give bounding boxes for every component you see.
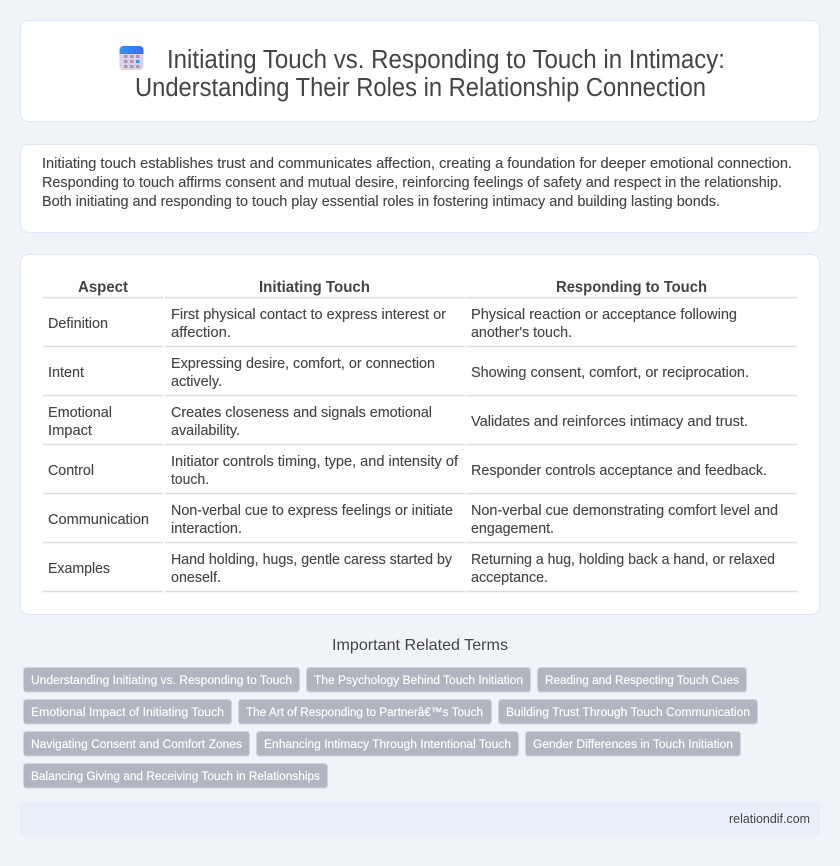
intro text: Initiating touch establishes trust and communicates affection, creating a foundation for deeper emotional connection. bbox=[42, 156, 792, 172]
row: intent: Intent bbox=[48, 365, 84, 381]
related terms chips: Balancing Giving and Receiving Touch in Relationships bbox=[31, 769, 320, 783]
row: emotional impact bbox=[48, 405, 748, 439]
row: definition: affection. bbox=[171, 325, 231, 341]
related terms chips: Understanding Initiating vs. Responding to Touch bbox=[31, 673, 292, 687]
title: Understanding Their Roles in Relationship Connection bbox=[135, 74, 706, 102]
table header: Initiating Touch bbox=[259, 279, 370, 296]
row: definition bbox=[48, 307, 737, 341]
row: intent: actively. bbox=[171, 374, 222, 390]
footer: relationdif.com bbox=[729, 812, 810, 826]
row: control: Control bbox=[48, 463, 94, 479]
row: definition: Physical reaction or acceptance following bbox=[471, 307, 737, 323]
row: examples: Returning a hug, holding back a hand, or relaxed bbox=[471, 552, 775, 568]
icon: calendar bbox=[120, 46, 144, 70]
related terms chips: Reading and Respecting Touch Cues bbox=[545, 673, 739, 687]
footer bbox=[20, 802, 820, 836]
row: definition: First physical contact to express interest or bbox=[171, 307, 446, 323]
row: emotional impact: Impact bbox=[48, 423, 92, 439]
table header: Aspect bbox=[78, 279, 129, 296]
panel: introduction bbox=[20, 144, 820, 232]
intro text: Both initiating and responding to touch play essential roles in fostering intimacy and building lasting bonds. bbox=[42, 194, 720, 210]
row: intent: Expressing desire, comfort, or connection bbox=[171, 356, 435, 372]
title bbox=[135, 46, 725, 102]
table header: Responding to Touch bbox=[556, 279, 707, 296]
row: communication: Communication bbox=[48, 512, 149, 528]
related terms chips: Emotional Impact of Initiating Touch bbox=[31, 705, 224, 719]
related terms chips: The Psychology Behind Touch Initiation bbox=[314, 673, 523, 687]
related terms chips bbox=[24, 668, 758, 788]
row: communication: engagement. bbox=[471, 521, 554, 537]
row: emotional impact: availability. bbox=[171, 423, 240, 439]
title: Initiating Touch vs. Responding to Touch in Intimacy: bbox=[167, 46, 725, 74]
row: intent: Showing consent, comfort, or reciprocation. bbox=[471, 365, 749, 381]
row: communication bbox=[48, 503, 778, 537]
panel: comparison table bbox=[20, 254, 820, 614]
table header bbox=[78, 279, 707, 296]
row: examples: Examples bbox=[48, 561, 110, 577]
row: examples: oneself. bbox=[171, 570, 221, 586]
row: communication: Non-verbal cue to express feelings or initiate bbox=[171, 503, 453, 519]
row: examples: acceptance. bbox=[471, 570, 548, 586]
row: emotional impact: Creates closeness and signals emotional bbox=[171, 405, 432, 421]
row: control: Responder controls acceptance and feedback. bbox=[471, 463, 767, 479]
panel: title card bbox=[20, 20, 820, 122]
row: examples: Hand holding, hugs, gentle caress started by bbox=[171, 552, 453, 568]
row: control: touch. bbox=[171, 472, 209, 488]
related terms chips: Building Trust Through Touch Communication bbox=[506, 705, 750, 719]
row: intent bbox=[48, 356, 749, 390]
row: control bbox=[48, 454, 767, 488]
row: definition: another's touch. bbox=[471, 325, 572, 341]
row: definition: Definition bbox=[48, 316, 108, 332]
row: communication: Non-verbal cue demonstrating comfort level and bbox=[471, 503, 778, 519]
row: examples bbox=[48, 552, 775, 586]
related terms chips: Enhancing Intimacy Through Intentional Touch bbox=[264, 737, 511, 751]
related terms chips: The Art of Responding to Partnerâ€™s Touch bbox=[246, 705, 483, 719]
row: emotional impact: Validates and reinforces intimacy and trust. bbox=[471, 414, 748, 430]
row: communication: interaction. bbox=[171, 521, 242, 537]
row: emotional impact: Emotional bbox=[48, 405, 112, 421]
related terms chips: Gender Differences in Touch Initiation bbox=[533, 737, 733, 751]
related terms chips: Navigating Consent and Comfort Zones bbox=[31, 737, 242, 751]
intro text: Responding to touch affirms consent and mutual desire, reinforcing feelings of safety and respect in the relationship. bbox=[42, 175, 782, 191]
intro text bbox=[42, 156, 792, 210]
row: control: Initiator controls timing, type, and intensity of bbox=[171, 454, 459, 470]
heading: important related terms: Important Related Terms bbox=[332, 637, 508, 654]
